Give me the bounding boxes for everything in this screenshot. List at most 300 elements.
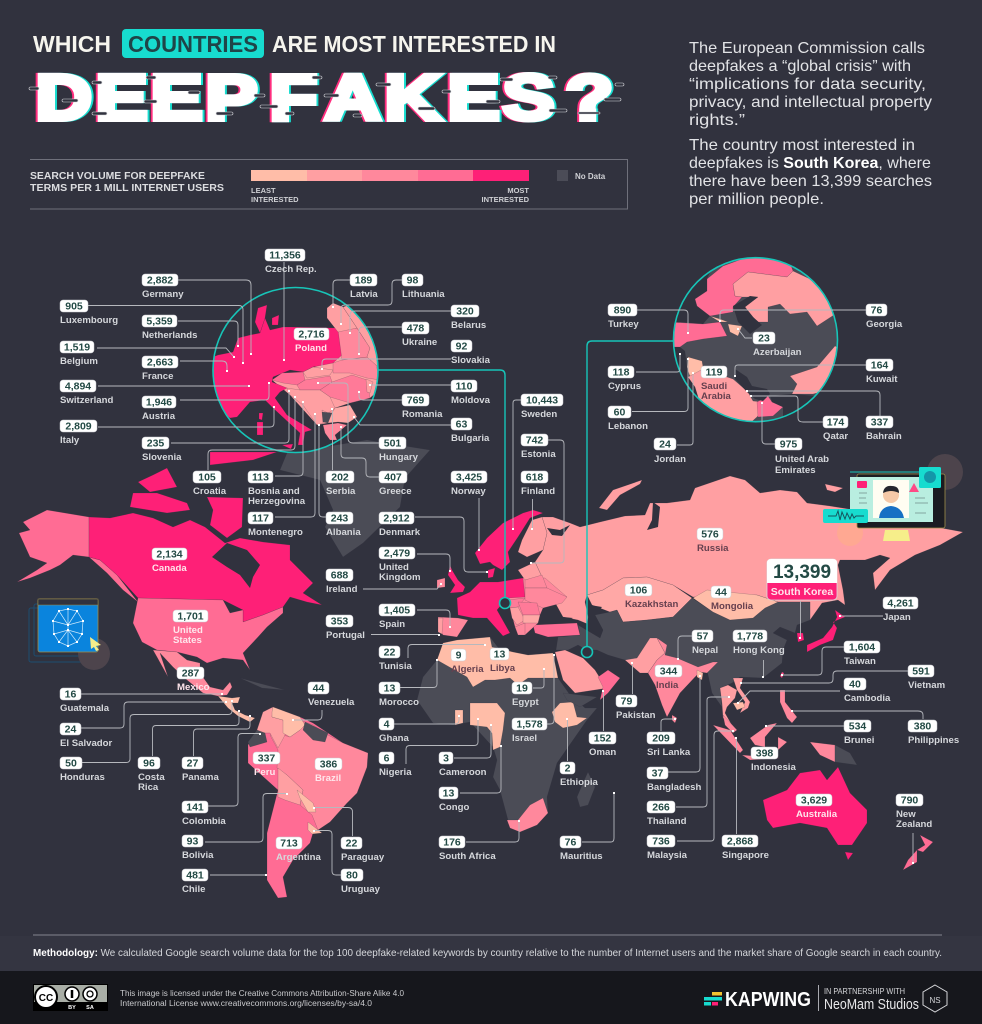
Ukraine bbox=[525, 588, 567, 608]
United Kingdom bbox=[448, 565, 465, 593]
label: Uruguay: 80 bbox=[346, 870, 358, 882]
Colombia bbox=[257, 707, 285, 748]
label: Israel: 1,578 bbox=[516, 718, 543, 730]
label: New Zealand bbox=[896, 794, 932, 830]
label: Sweden: Sweden bbox=[521, 409, 557, 420]
Oman and UAE bbox=[598, 670, 620, 700]
Black Sea bbox=[540, 607, 573, 622]
label: Montenegro: 117 bbox=[252, 512, 269, 524]
label: Slovenia bbox=[142, 437, 182, 463]
Pakistan bbox=[790, 346, 836, 394]
Ob gulf bbox=[647, 502, 660, 530]
intro text block: The country most interested in bbox=[689, 137, 915, 154]
label: Montenegro bbox=[248, 512, 303, 538]
label: Bangladesh: Bangladesh bbox=[647, 782, 702, 793]
label: Tunisia bbox=[379, 646, 413, 672]
Ghana bbox=[455, 710, 463, 725]
label: Canada: Canada bbox=[152, 563, 187, 574]
label: Brazil: 386 bbox=[320, 758, 337, 770]
Papua New Guinea bbox=[835, 745, 857, 765]
Romania bbox=[518, 602, 540, 615]
label: Israel: Israel bbox=[512, 733, 537, 744]
label: Mexico: 287 bbox=[182, 668, 199, 680]
label: Brazil bbox=[315, 758, 342, 784]
Austria bbox=[272, 372, 305, 385]
Sumatra bbox=[713, 725, 743, 753]
label: Venezuela: 44 bbox=[313, 682, 324, 694]
label: Lithuania: 98 bbox=[407, 274, 418, 286]
label: Lebanon bbox=[608, 406, 648, 432]
badge: Creative Commons BY-SA: CC bbox=[39, 993, 53, 1004]
label: Albania: 243 bbox=[331, 512, 348, 524]
label: Mexico: Mexico bbox=[177, 682, 210, 693]
label: Kuwait: Kuwait bbox=[866, 374, 898, 385]
label: Costa Rica: Costa bbox=[138, 772, 165, 783]
label: Croatia: 105 bbox=[198, 472, 216, 484]
label: Singapore bbox=[722, 835, 769, 861]
Balkans bbox=[510, 607, 525, 625]
no-data: Greenland bbox=[280, 440, 430, 557]
label: Vietnam: Vietnam bbox=[908, 680, 945, 691]
label: France: 2,663 bbox=[147, 356, 173, 368]
intro text block: deepfakes a “global crisis” with bbox=[689, 58, 911, 75]
label: Turkey: Turkey bbox=[608, 319, 639, 330]
Mediterranean islands bbox=[257, 413, 293, 449]
label: Thailand: Thailand bbox=[647, 816, 687, 827]
label: Cameroon: Cameroon bbox=[439, 767, 487, 778]
label: Malaysia: Malaysia bbox=[647, 850, 688, 861]
label: South Africa: 176 bbox=[443, 836, 461, 848]
label: Turkey: 890 bbox=[614, 304, 631, 316]
label: Indonesia: 398 bbox=[756, 748, 773, 760]
intro text block bbox=[689, 40, 932, 208]
label: Austria: Austria bbox=[142, 411, 176, 422]
label: Albania: Albania bbox=[326, 527, 361, 538]
label: United Kingdom bbox=[379, 547, 421, 583]
label: Norway: 3,425 bbox=[456, 472, 482, 484]
label: Azerbaijan: 23 bbox=[758, 332, 770, 344]
label: Peru: Peru bbox=[254, 767, 275, 778]
label: Paraguay bbox=[341, 837, 385, 863]
label: Spain: Spain bbox=[379, 619, 405, 630]
label: Georgia bbox=[866, 304, 903, 330]
Caspian Sea bbox=[733, 296, 762, 334]
label: Germany: Germany bbox=[142, 289, 184, 300]
label: Libya: Libya bbox=[490, 663, 516, 674]
label: Cameroon: 3 bbox=[443, 752, 449, 764]
title line bbox=[33, 29, 556, 58]
label: Lebanon: Lebanon bbox=[608, 421, 648, 432]
label: Slovakia: 92 bbox=[456, 340, 467, 352]
Taiwan bbox=[780, 672, 784, 678]
label: Bolivia: 93 bbox=[187, 836, 198, 848]
label: Libya bbox=[490, 648, 516, 674]
Scandinavia bbox=[475, 510, 543, 570]
label: Honduras bbox=[60, 757, 105, 783]
Arabian Sea bbox=[770, 394, 814, 416]
label: United States: United bbox=[173, 625, 203, 636]
label: Greece: Greece bbox=[379, 486, 412, 497]
label: Algeria: Algeria bbox=[451, 664, 484, 675]
Black Sea and open water bbox=[676, 272, 710, 324]
label: Peru: 337 bbox=[258, 752, 275, 764]
label: Cambodia: 40 bbox=[849, 678, 861, 690]
label: Argentina bbox=[276, 837, 321, 863]
label: Nepal bbox=[692, 630, 718, 656]
label: Japan bbox=[883, 597, 918, 623]
label: Estonia: 742 bbox=[526, 434, 543, 446]
western and central Europe bbox=[205, 318, 342, 445]
label: Thailand: 266 bbox=[652, 802, 670, 814]
Ukraine bbox=[333, 357, 380, 380]
Russia bbox=[535, 476, 963, 625]
Sri Lanka bbox=[672, 715, 677, 723]
label: Panama: 27 bbox=[187, 758, 198, 770]
label: Oman: 152 bbox=[594, 732, 611, 744]
label: Vietnam: 591 bbox=[912, 666, 930, 678]
label: Guatemala: Guatemala bbox=[60, 703, 110, 714]
label: Kuwait: 164 bbox=[871, 360, 888, 372]
label: Australia bbox=[796, 794, 838, 820]
label: United Arab Emirates: Emirates bbox=[775, 465, 816, 476]
Novaya Zemlya bbox=[599, 480, 642, 510]
label: Latvia: 189 bbox=[355, 274, 372, 286]
United States bbox=[133, 598, 283, 670]
label: Kazakhstan: 106 bbox=[630, 584, 647, 596]
label: India: 344 bbox=[660, 666, 677, 678]
title line: ARE MOST INTERESTED IN bbox=[272, 31, 556, 57]
label: Poland: 2,716 bbox=[298, 328, 325, 340]
Bolivia bbox=[278, 768, 303, 805]
Guianas bbox=[303, 722, 328, 742]
label: Finland: Finland bbox=[521, 486, 555, 497]
label: Paraguay: Paraguay bbox=[341, 852, 385, 863]
label: Belgium: 1,519 bbox=[64, 342, 90, 354]
label: Finland bbox=[521, 471, 555, 497]
title: DEEPFAKES? glitch wordmark: DEEPFAKES? bbox=[36, 62, 613, 134]
label: Sweden bbox=[521, 394, 563, 420]
Danish islands bbox=[272, 315, 279, 325]
license text bbox=[120, 989, 405, 1008]
logo: NeoMam Studios bbox=[818, 985, 947, 1013]
label: Bosnia and Herzegovina bbox=[248, 471, 306, 507]
label: Kazakhstan bbox=[625, 584, 678, 610]
Romania bbox=[320, 375, 370, 403]
label: Egypt bbox=[512, 682, 539, 708]
label: Mongolia: 44 bbox=[715, 586, 727, 598]
Asia no-data mass bbox=[556, 598, 810, 707]
label: Tunisia: 22 bbox=[384, 646, 395, 658]
Philippines bbox=[780, 690, 797, 723]
label: Hong Kong: 1,778 bbox=[737, 630, 763, 642]
label: Georgia: Georgia bbox=[866, 319, 903, 330]
label: Bangladesh: 37 bbox=[652, 768, 663, 780]
label: Portugal: 353 bbox=[331, 616, 348, 628]
label: Sweden: 10,443 bbox=[526, 394, 558, 406]
methodology band bbox=[0, 936, 982, 971]
Persian Gulf bbox=[735, 369, 770, 401]
inset: Middle East bbox=[672, 256, 838, 422]
label: Azerbaijan: Azerbaijan bbox=[753, 347, 802, 358]
label: Ireland: Ireland bbox=[326, 584, 358, 595]
label: Hong Kong bbox=[733, 630, 785, 656]
label: Saudi Arabia: 119 bbox=[706, 366, 723, 378]
label: Bulgaria: Bulgaria bbox=[451, 433, 490, 444]
Kosovo and North Macedonia bbox=[322, 412, 332, 423]
label: Albania bbox=[326, 512, 361, 538]
label: Denmark: 2,912 bbox=[383, 512, 410, 524]
label: Bosnia and Herzegovina: Bosnia and bbox=[248, 486, 300, 497]
label: Saudi Arabia bbox=[701, 366, 732, 402]
label: Nigeria: Nigeria bbox=[379, 767, 412, 778]
Madagascar bbox=[577, 772, 595, 807]
label: Ethiopia: Ethiopia bbox=[560, 777, 599, 788]
label: Sri Lanka: 209 bbox=[652, 732, 670, 744]
label: Bulgaria bbox=[451, 418, 490, 444]
intro text block: “implications for data security, bbox=[689, 76, 926, 93]
label: Egypt: 19 bbox=[516, 682, 528, 694]
label: Congo bbox=[439, 787, 470, 813]
Arctic Canada bbox=[130, 452, 277, 538]
Tasmania bbox=[845, 852, 853, 860]
Central America bbox=[218, 696, 255, 722]
Alaska bbox=[17, 510, 138, 602]
label: Jordan bbox=[654, 438, 686, 465]
Saudi Arabia bbox=[555, 650, 608, 693]
label: Luxembourg bbox=[60, 300, 118, 326]
label: Poland: Poland bbox=[295, 343, 327, 354]
Slovakia bbox=[303, 367, 333, 378]
logo: NeoMam Studios: NS bbox=[929, 996, 941, 1005]
label: Venezuela bbox=[308, 682, 355, 708]
label: Philippines: 380 bbox=[914, 720, 931, 732]
label: Estonia: Estonia bbox=[521, 449, 556, 460]
label: Singapore: 2,868 bbox=[727, 836, 753, 848]
label: Ireland bbox=[326, 569, 358, 595]
label: Bosnia and Herzegovina: Herzegovina bbox=[248, 496, 306, 507]
label: Latvia: Latvia bbox=[350, 289, 378, 300]
Georgia bbox=[710, 316, 728, 322]
label: Ukraine: Ukraine bbox=[402, 337, 437, 348]
label: Peru bbox=[253, 752, 280, 778]
label: Cyprus: 118 bbox=[613, 366, 630, 378]
label: Bahrain: Bahrain bbox=[866, 431, 902, 442]
label: Russia bbox=[697, 528, 729, 554]
label: Germany bbox=[142, 274, 184, 300]
Levant bbox=[687, 357, 703, 376]
Mongolia bbox=[693, 590, 778, 620]
label: Brunei: Brunei bbox=[844, 735, 874, 746]
label: Philippines: Philippines bbox=[908, 735, 959, 746]
label: Hungary: Hungary bbox=[379, 452, 419, 463]
label: Hungary bbox=[379, 437, 419, 463]
New Zealand bbox=[917, 835, 933, 852]
title line: WHICH bbox=[33, 31, 111, 57]
Borneo bbox=[750, 723, 777, 747]
label: Slovenia: Slovenia bbox=[142, 452, 182, 463]
label: Ukraine: 478 bbox=[407, 322, 424, 334]
label: India bbox=[655, 665, 682, 691]
label: Serbia: Serbia bbox=[326, 486, 356, 497]
label: Finland: 618 bbox=[526, 472, 543, 484]
label: Libya: 13 bbox=[494, 648, 505, 660]
label: United Kingdom: United bbox=[379, 562, 409, 573]
label: Estonia bbox=[521, 434, 556, 460]
label: Saudi Arabia: Saudi bbox=[701, 381, 727, 392]
western Europe bbox=[457, 578, 525, 636]
label: Mauritius bbox=[560, 836, 603, 862]
label: Turkey bbox=[608, 304, 639, 330]
Greece bbox=[323, 423, 347, 440]
label: Romania bbox=[402, 394, 443, 420]
South Korea bbox=[797, 633, 804, 642]
label: Luxembourg: Luxembourg bbox=[60, 315, 118, 326]
label: Chile: Chile bbox=[182, 884, 205, 895]
label: Costa Rica: 96 bbox=[143, 758, 155, 770]
Siberian island bbox=[825, 484, 843, 492]
label: Bahrain bbox=[866, 416, 902, 442]
label: Cyprus: Cyprus bbox=[608, 381, 641, 392]
label: United States: States bbox=[173, 635, 202, 646]
label: El Salvador: El Salvador bbox=[60, 738, 113, 749]
label: Israel bbox=[512, 718, 547, 744]
Russia bbox=[342, 306, 377, 366]
label: Panama bbox=[182, 757, 219, 783]
label: Bangladesh bbox=[647, 767, 702, 793]
Java bbox=[742, 755, 780, 760]
India bbox=[648, 638, 718, 717]
label: Ghana bbox=[379, 718, 410, 744]
legend panel: INTERESTED bbox=[481, 195, 530, 204]
Bangladesh bbox=[697, 670, 703, 680]
Japan bbox=[807, 610, 845, 652]
label: Colombia bbox=[182, 801, 226, 827]
label: Taiwan: Taiwan bbox=[844, 656, 876, 667]
anchor: Middle East bbox=[582, 646, 592, 658]
label: Montenegro: Montenegro bbox=[248, 527, 303, 538]
label: Romania: Romania bbox=[402, 409, 443, 420]
label: Belgium: Belgium bbox=[60, 356, 98, 367]
label: Latvia bbox=[350, 274, 378, 300]
label: Costa Rica: Rica bbox=[138, 782, 159, 793]
logo: Kapwing: KAPWING bbox=[725, 989, 811, 1011]
label: Morocco: 13 bbox=[384, 682, 395, 694]
label: Netherlands bbox=[142, 315, 197, 341]
Moldova bbox=[366, 379, 373, 393]
label: Netherlands: 5,359 bbox=[146, 316, 173, 328]
label: Slovakia: Slovakia bbox=[451, 355, 491, 366]
label: Netherlands: Netherlands bbox=[142, 330, 197, 341]
label: Egypt: Egypt bbox=[512, 697, 539, 708]
label: El Salvador bbox=[60, 723, 113, 749]
Denmark bbox=[488, 568, 495, 578]
Paraguay bbox=[297, 790, 316, 812]
White Sea bbox=[547, 525, 570, 536]
leader end dots bbox=[221, 306, 914, 876]
label: Austria: 1,946 bbox=[146, 396, 172, 408]
label: Austria bbox=[142, 396, 176, 422]
connector: Europe inset bbox=[378, 370, 505, 598]
Azerbaijan bbox=[728, 324, 742, 336]
Africa no-data base bbox=[417, 637, 597, 832]
label: Italy bbox=[60, 420, 97, 446]
label: South Africa: South Africa bbox=[439, 851, 496, 862]
label: Jordan: Jordan bbox=[654, 454, 686, 465]
label: Poland bbox=[294, 328, 329, 354]
license text: This image is licensed under the Creative Commons Attribution-Share Alike 4.0 bbox=[120, 989, 405, 998]
label: Bulgaria: 63 bbox=[456, 418, 467, 430]
label: Jordan: 24 bbox=[659, 438, 671, 450]
label: Thailand bbox=[647, 801, 687, 827]
label: Lithuania bbox=[402, 274, 445, 300]
Hudson Bay bbox=[212, 543, 260, 588]
label: Slovenia: 235 bbox=[147, 438, 164, 450]
label: Azerbaijan bbox=[753, 332, 802, 358]
label: Moldova: 110 bbox=[456, 380, 473, 392]
label: Luxembourg: 905 bbox=[65, 300, 83, 312]
label: Pakistan: Pakistan bbox=[616, 710, 656, 721]
legend panel: TERMS PER 1 MILL INTERNET USERS bbox=[30, 182, 224, 194]
label: Japan: 4,261 bbox=[887, 598, 914, 610]
Mexico bbox=[153, 650, 232, 696]
label: Chile: 481 bbox=[186, 870, 204, 882]
Mediterranean bbox=[674, 347, 698, 397]
North Africa bbox=[437, 637, 558, 687]
Caspian Sea bbox=[587, 605, 603, 638]
label: Cambodia bbox=[844, 678, 891, 704]
label: Denmark: Denmark bbox=[379, 527, 421, 538]
title line: COUNTRIES bbox=[128, 31, 258, 57]
label: Malaysia bbox=[647, 835, 688, 861]
label: Australia: Australia bbox=[796, 809, 838, 820]
label: Tunisia: Tunisia bbox=[379, 661, 413, 672]
label: Italy: Italy bbox=[60, 435, 80, 446]
label: Nigeria: 6 bbox=[384, 752, 390, 764]
label: Algeria bbox=[451, 649, 484, 675]
label: Moldova: Moldova bbox=[451, 395, 491, 406]
Turkey bbox=[670, 322, 727, 347]
label: Malaysia: 736 bbox=[652, 836, 670, 848]
label: Slovakia bbox=[451, 340, 491, 366]
label: Sri Lanka: Sri Lanka bbox=[647, 747, 691, 758]
label: United Arab Emirates: United Arab bbox=[775, 454, 829, 465]
leader lines bbox=[81, 262, 923, 875]
label: Greece: 407 bbox=[384, 472, 402, 484]
Hungary area bbox=[508, 598, 525, 608]
label: New Zealand: 790 bbox=[901, 794, 918, 806]
label: Croatia: Croatia bbox=[193, 486, 227, 497]
label: Italy: 2,809 bbox=[65, 420, 92, 432]
label: Honduras: Honduras bbox=[60, 772, 105, 783]
label: Cyprus bbox=[608, 366, 641, 392]
label: Vietnam bbox=[908, 665, 945, 691]
label: Taiwan: 1,604 bbox=[849, 642, 875, 654]
label: Japan: Japan bbox=[883, 612, 911, 623]
label: Norway bbox=[451, 471, 487, 497]
label: Morocco: Morocco bbox=[379, 697, 419, 708]
label: Mexico bbox=[177, 667, 210, 693]
label: Denmark bbox=[379, 512, 421, 538]
label: United States bbox=[173, 610, 208, 646]
eastern Europe base bbox=[272, 342, 378, 425]
label: Panama: Panama bbox=[182, 772, 219, 783]
legend panel: SEARCH VOLUME FOR DEEPFAKE bbox=[30, 170, 205, 182]
callout: South Korea: South Korea bbox=[771, 586, 833, 598]
Greece bbox=[515, 623, 525, 635]
label: Colombia: 141 bbox=[186, 802, 204, 814]
label: Costa Rica bbox=[138, 757, 165, 793]
label: Singapore: Singapore bbox=[722, 850, 769, 861]
